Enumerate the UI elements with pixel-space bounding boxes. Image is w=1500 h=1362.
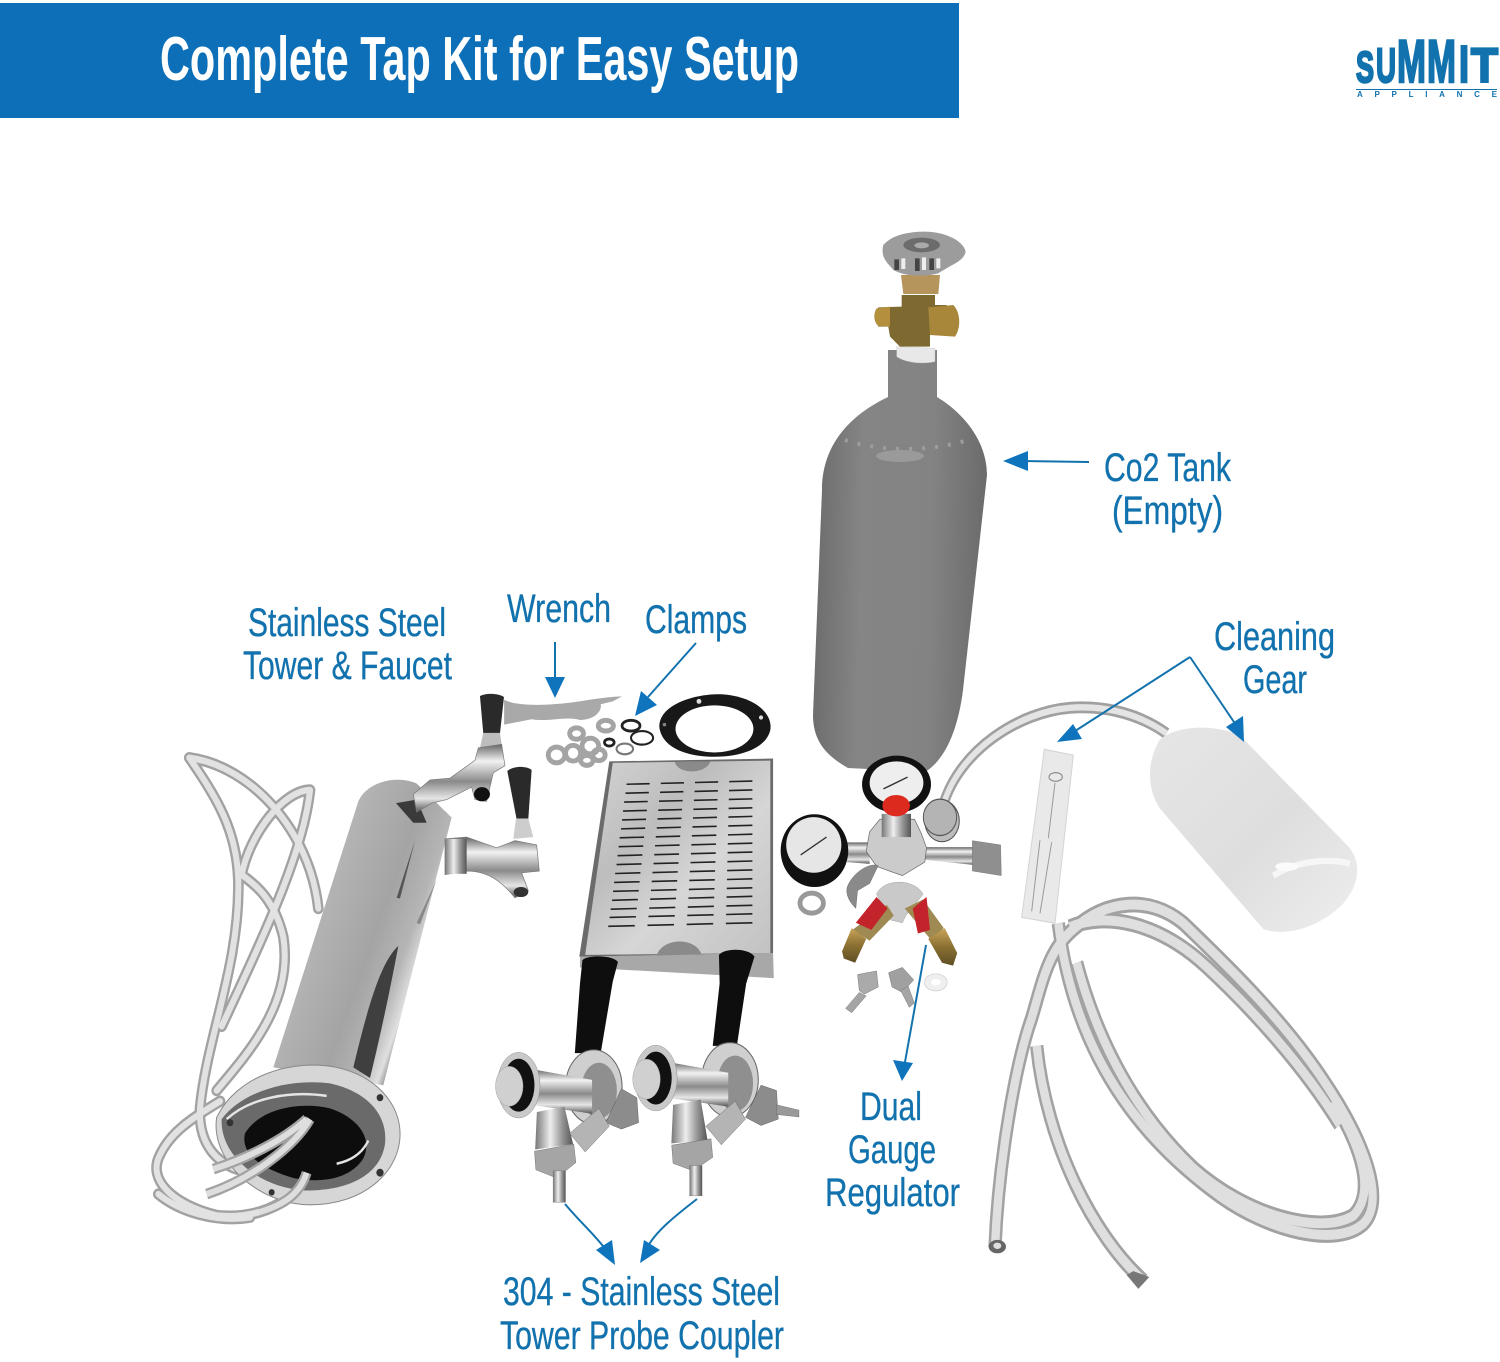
- left red valve: [842, 897, 894, 963]
- label: tower and faucet: Tower & Faucet: [243, 644, 452, 688]
- CO2 tank: [813, 232, 987, 772]
- tubes entering base: [207, 1119, 310, 1212]
- arrow: Co2 tank: [1003, 451, 1089, 471]
- beer tubing: [157, 758, 318, 1219]
- cleaning gear and spare tubing: [923, 707, 1373, 1289]
- wrench, clamps, gasket, drip tray, couplers: [496, 694, 1001, 1202]
- small clamp: [847, 865, 878, 908]
- logo: Summit Appliance: APPLIANCE: [1357, 90, 1498, 99]
- left gauge: [781, 814, 848, 913]
- regulator body: [866, 819, 927, 876]
- label: dual gauge regulator: Gauge: [848, 1128, 936, 1172]
- label: dual gauge regulator: [825, 1085, 960, 1215]
- upper faucet: [413, 694, 505, 812]
- arrow: wrench: [545, 642, 565, 698]
- header banner: [0, 3, 959, 118]
- cleaning bottle tube: [943, 707, 1167, 805]
- label: tower and faucet: Stainless Steel: [248, 601, 446, 645]
- right red valve: [905, 897, 957, 966]
- cleaning brush packet: [1022, 749, 1073, 923]
- regulator nut and hose end: [925, 800, 959, 842]
- black hose left: [575, 956, 618, 1053]
- lower faucet: [445, 767, 539, 898]
- tower base flange: [216, 1065, 400, 1205]
- wrench: [504, 696, 622, 725]
- label: Co2 Tank: Co2 Tank: [1104, 446, 1232, 490]
- tank valve: [874, 232, 966, 363]
- left arm: [847, 842, 870, 864]
- gasket: [659, 694, 771, 757]
- dual gauge regulator: [781, 756, 1001, 1013]
- label: probe coupler: Tower Probe Coupler: [500, 1314, 784, 1358]
- tank cylinder: [813, 350, 987, 772]
- tower and faucet: [157, 694, 539, 1219]
- logo: Summit Appliance: U: [1376, 40, 1396, 93]
- label: probe coupler: [500, 1270, 784, 1358]
- right probe coupler: [633, 1043, 799, 1196]
- red cap: [882, 795, 910, 816]
- label: probe coupler: 304 - Stainless Steel: [503, 1270, 780, 1314]
- tray slots: [608, 781, 752, 926]
- tube ends: [989, 1240, 1149, 1289]
- label: dual gauge regulator: Dual: [860, 1085, 922, 1129]
- splitter: [877, 882, 923, 923]
- label: Co2 Tank: (Empty): [1112, 489, 1223, 533]
- label: cleaning gear: Cleaning: [1214, 615, 1335, 659]
- left probe coupler: [496, 1050, 639, 1202]
- right arm: [923, 847, 973, 865]
- title: Complete Tap Kit for Easy Setup: [160, 25, 799, 94]
- logo: Summit Appliance: I: [1459, 36, 1469, 94]
- spare barbs and washer: [845, 967, 947, 1013]
- spare beer tubing: [995, 905, 1373, 1281]
- clamps: [548, 720, 653, 765]
- logo: Summit Appliance: M: [1397, 28, 1426, 95]
- label: Co2 Tank: [1104, 446, 1232, 533]
- logo: Summit Appliance: S: [1356, 43, 1374, 92]
- arrows: cleaning gear: [1057, 657, 1244, 742]
- logo: Summit Appliance: [1356, 28, 1498, 99]
- label: cleaning gear: Gear: [1243, 658, 1307, 702]
- upper gauge: [862, 756, 931, 813]
- black hose right: [713, 950, 754, 1046]
- logo: Summit Appliance: T: [1471, 40, 1498, 93]
- arrow: regulator: [893, 945, 926, 1081]
- label: tower and faucet: [243, 601, 452, 688]
- drip tray: [579, 759, 774, 978]
- cleaning bottle: [1150, 728, 1357, 932]
- logo: Summit Appliance: M: [1427, 28, 1456, 95]
- arrows: couplers: [565, 1199, 697, 1265]
- arrow: clamps: [635, 643, 696, 716]
- tower body: [273, 780, 452, 1085]
- label: cleaning gear: [1214, 615, 1335, 702]
- label: clamps: Clamps: [645, 598, 747, 642]
- label: dual gauge regulator: Regulator: [825, 1171, 960, 1215]
- label: wrench: Wrench: [507, 587, 611, 631]
- tube nut: [923, 799, 957, 835]
